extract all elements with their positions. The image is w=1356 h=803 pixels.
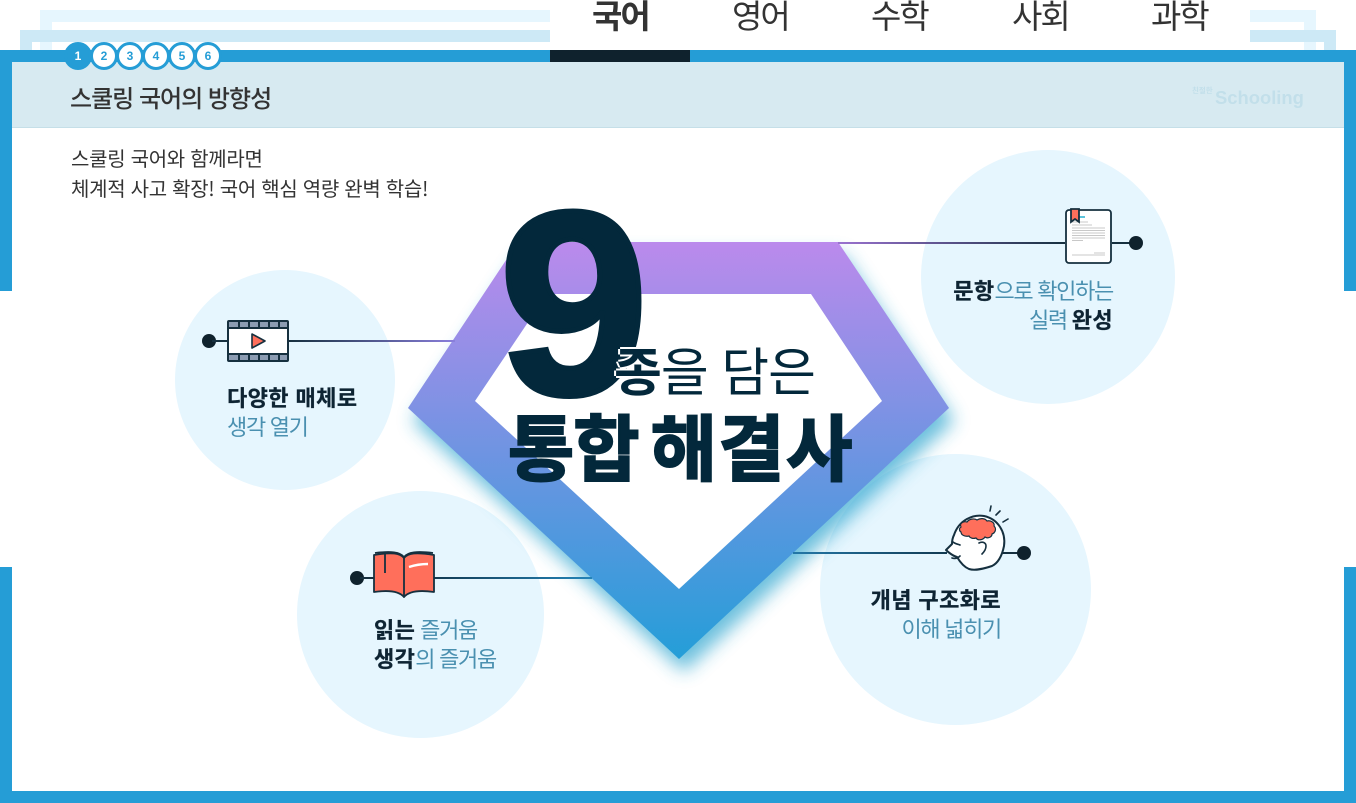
badge 5 (168, 42, 196, 70)
label: media: 다양한 매체로 (227, 381, 357, 413)
active tab marker (550, 50, 690, 62)
badge 2: 2 (101, 49, 107, 63)
label: concepts (871, 583, 1001, 644)
decorative back frames (40, 10, 1316, 70)
badge 6 (194, 42, 222, 70)
label: reading: 생각의 즐거움 (374, 642, 496, 674)
intro text: 스쿨링 국어와 함께라면 (71, 143, 263, 172)
icon: head with brain (946, 506, 1008, 570)
headline line 2: 통합 해결사 (508, 391, 854, 496)
connector: reading (350, 571, 592, 585)
badge 3 (116, 42, 144, 70)
big numeral 9: 9 (499, 157, 649, 450)
icon: open book (374, 552, 434, 597)
connector: questions (838, 236, 1143, 250)
frame side gaps (0, 291, 1356, 567)
badge 3: 3 (127, 49, 133, 63)
section heading: 스쿨링 국어의 방향성 (70, 79, 271, 114)
tab bar (550, 0, 1250, 50)
logo (1192, 85, 1304, 108)
label: media: 생각 열기 (227, 410, 308, 442)
pentagon band (408, 242, 949, 659)
logo small text: 친절한 (1192, 85, 1213, 96)
pentagon shadow (413, 255, 954, 672)
circle: reading (297, 491, 544, 738)
intro text (71, 143, 428, 202)
intro text: 체계적 사고 확장! 국어 핵심 역량 완벽 학습! (71, 173, 428, 202)
connector: media (202, 334, 455, 348)
pentagon inner (475, 294, 882, 589)
headline line 1: 종을 담은 (614, 331, 815, 406)
label: concepts: 개념 구조화로 (871, 583, 1001, 615)
label: reading: 읽는 즐거움 (374, 613, 477, 645)
badge 1 active: 1 (75, 49, 81, 63)
circle: concepts (820, 454, 1091, 725)
badge 4: 4 (153, 49, 159, 63)
label: concepts: 이해 넓히기 (901, 612, 1001, 644)
icon: document (1066, 209, 1111, 263)
badge 4 (142, 42, 170, 70)
badge 1 active (64, 42, 92, 70)
circle: questions (921, 150, 1175, 404)
label: questions: 문항으로 확인하는 (953, 274, 1113, 306)
page number badges (65, 42, 221, 70)
logo wordmark: Schooling (1215, 87, 1304, 108)
label: media (227, 381, 357, 442)
label: questions (953, 274, 1114, 335)
label: reading (374, 613, 496, 674)
badge 5: 5 (179, 49, 185, 63)
icon: film with play (227, 320, 289, 362)
header band (12, 62, 1344, 128)
badge 6: 6 (205, 49, 211, 63)
badge 2 (90, 42, 118, 70)
connector: concepts (793, 546, 1031, 560)
label: questions: 실력 완성 (1029, 303, 1113, 335)
circle: media (175, 270, 395, 490)
